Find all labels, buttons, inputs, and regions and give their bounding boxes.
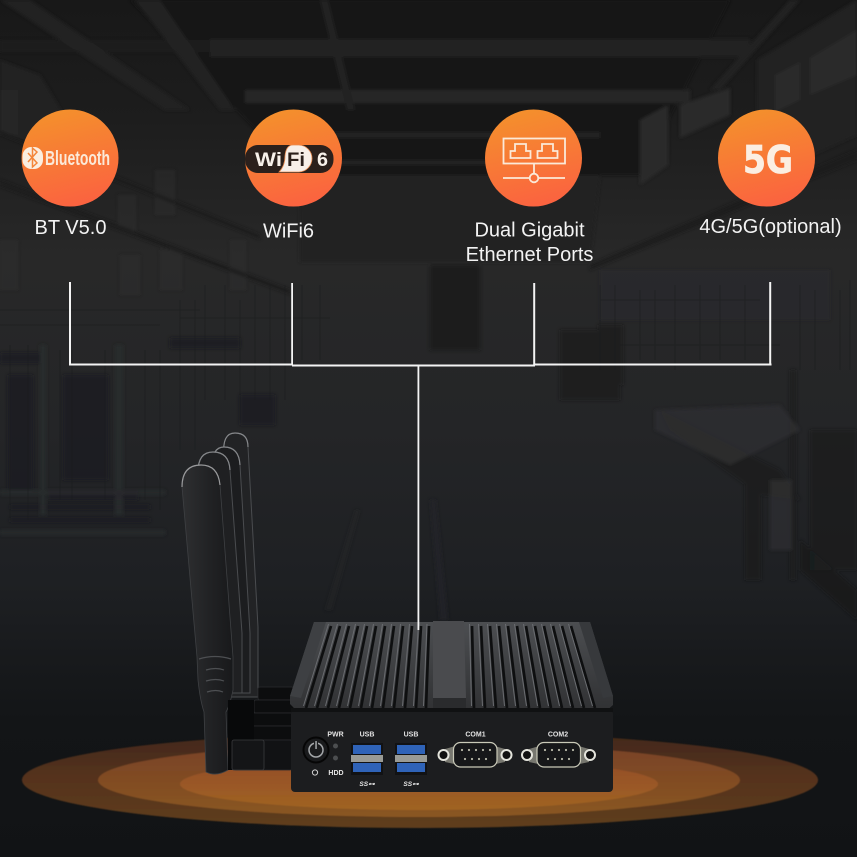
icon: ethernet ports [503, 138, 565, 182]
feature: Bluetooth [22, 110, 118, 239]
label: Ethernet Ports [466, 244, 593, 266]
front antenna [182, 465, 233, 774]
icon: WiFi 6 logo: 6 [317, 150, 328, 171]
panel labels: SS⊶ [403, 781, 419, 788]
panel labels: COM1 [465, 732, 486, 738]
panel labels: HDD [328, 770, 344, 777]
floor lanes [430, 500, 448, 620]
antenna hinges [233, 687, 294, 770]
heatsink top [290, 621, 613, 712]
panel labels: USB [360, 732, 374, 738]
icon: WiFi 6 logo: Wi [255, 150, 282, 171]
icon: WiFi 6 logo [245, 145, 334, 173]
center block [433, 621, 466, 698]
panel labels: COM2 [548, 732, 568, 738]
dark gap centre, upper floor [430, 265, 480, 350]
right structure [560, 325, 857, 580]
left structure [0, 338, 275, 522]
feature: WiFi6 [245, 110, 342, 242]
glowing floor ellipses [22, 732, 818, 828]
icon: WiFi 6 logo: Fi [287, 150, 305, 171]
label: WiFi6 [263, 220, 314, 242]
icon: Bluetooth logo: Bluetooth [45, 148, 110, 170]
label [466, 220, 593, 266]
mini PC [290, 621, 613, 792]
panel labels: USB [404, 732, 418, 738]
power button [304, 738, 338, 775]
connector lines [69, 282, 772, 630]
USB ports [351, 743, 427, 775]
left wall windows [0, 90, 246, 295]
fine vertical structure detail [0, 280, 850, 520]
COM ports [438, 742, 595, 767]
feature: 4G/5G [699, 110, 842, 238]
panel labels [327, 732, 568, 788]
ceiling [130, 0, 730, 175]
panel labels: SS⊶ [359, 781, 375, 788]
antennas [182, 433, 294, 774]
panel labels: PWR [327, 732, 344, 738]
feature: dual gigabit ethernet [466, 110, 593, 266]
front panel [291, 710, 613, 792]
icon: 5G: 5G [743, 138, 793, 182]
label: BT V5.0 [35, 217, 106, 239]
label: Dual Gigabit [474, 220, 585, 242]
label: 4G/5G(optional) [699, 216, 842, 238]
